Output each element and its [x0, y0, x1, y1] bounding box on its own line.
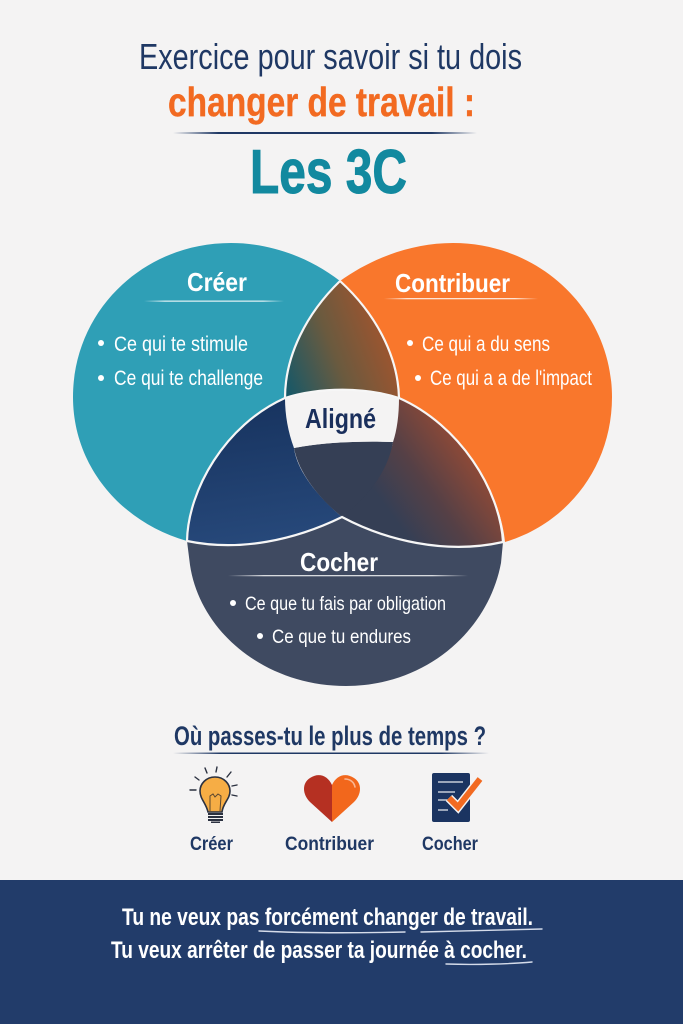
Cocher list: Ce que tu fais par obligation [245, 593, 446, 615]
icon: heart [304, 775, 360, 822]
title: Les 3C [250, 138, 407, 207]
panel: Contribuer circle [340, 243, 612, 542]
title: Exercice pour savoir si tu dois [139, 36, 522, 77]
Cocher list [230, 593, 446, 648]
Contribuer list: Ce qui a a de l'impact [430, 367, 592, 390]
panel: conclusion banner [0, 880, 683, 1024]
Cocher list: Ce que tu endures [272, 626, 411, 648]
Contribuer list [407, 333, 592, 390]
overlap: lower centre [294, 442, 393, 517]
title [139, 36, 522, 207]
panel: Aligné centre [285, 390, 399, 448]
icon labels: Cocher [422, 834, 479, 855]
venn diagram [73, 243, 612, 686]
hand-drawn underlines [259, 929, 542, 964]
overlap: Contribuer and Cocher [342, 398, 503, 547]
white outlines [187, 281, 503, 547]
question heading: Où passes-tu le plus de temps ? [174, 721, 486, 751]
overlap: Créer and Contribuer [285, 281, 399, 398]
Cocher heading: Cocher [300, 547, 378, 577]
conclusion text: Tu ne veux pas forcément changer de travail. [122, 904, 533, 931]
Aligné label: Aligné [305, 403, 376, 434]
Créer heading: Créer [187, 267, 247, 297]
icon: checklist [432, 773, 480, 822]
icon: light bulb [190, 767, 237, 823]
conclusion text: Tu veux arrêter de passer ta journée à cocher. [111, 937, 527, 964]
panel: Créer circle [73, 243, 340, 541]
icon labels [190, 834, 479, 855]
Créer list: Ce qui te stimule [114, 333, 248, 356]
Contribuer list: Ce qui a du sens [422, 333, 550, 356]
Créer list [98, 333, 263, 390]
overlap: Créer and Cocher [187, 398, 342, 545]
Créer heading [144, 267, 284, 302]
Créer list: Ce qui te challenge [114, 367, 263, 390]
icon labels: Contribuer [285, 834, 375, 855]
title: changer de travail : [168, 79, 475, 125]
panel: Cocher circle [187, 517, 503, 686]
Contribuer heading: Contribuer [395, 268, 510, 298]
icon labels: Créer [190, 834, 234, 855]
conclusion text [111, 904, 533, 964]
